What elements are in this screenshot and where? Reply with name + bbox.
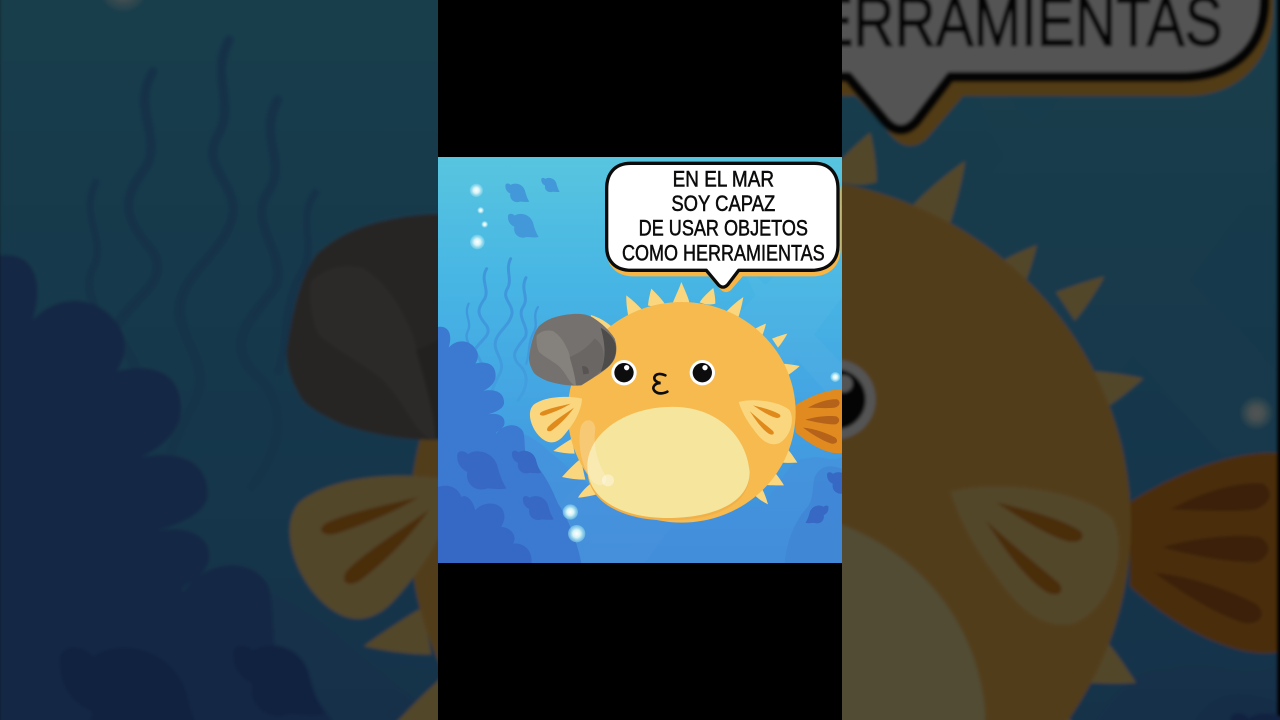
belly <box>580 407 750 520</box>
coral: right <box>800 466 842 518</box>
left fin <box>530 397 582 442</box>
bubbles <box>470 184 840 542</box>
speech bubble text <box>622 166 825 265</box>
fish 7 <box>805 506 829 523</box>
belly highlight <box>580 420 606 485</box>
fish 4 <box>457 451 506 490</box>
fish 3 <box>508 214 539 238</box>
speech bubble shape <box>606 163 841 292</box>
fish 1 <box>541 178 560 192</box>
right fin <box>739 400 792 444</box>
left eye <box>611 360 637 385</box>
highlight dot <box>602 474 614 486</box>
central black column <box>438 0 842 720</box>
panel: central illustration <box>438 157 855 563</box>
speech bubble text: COMO HERRAMIENTAS <box>622 240 825 265</box>
sea background <box>438 157 842 563</box>
speech bubble text: EN EL MAR <box>673 166 774 191</box>
spines <box>553 282 800 504</box>
fish 5 <box>512 451 541 473</box>
lower mid coral <box>524 434 553 455</box>
fish 8 <box>827 472 855 494</box>
light rays <box>505 204 842 563</box>
right eye <box>690 360 715 385</box>
seaweed <box>467 259 538 410</box>
fish 2 <box>505 184 529 202</box>
speech bubble text: DE USAR OBJETOS <box>639 216 808 241</box>
small fish, light <box>505 178 560 238</box>
fish 6 <box>523 496 554 520</box>
rock <box>529 314 616 386</box>
coral: bottom left foreground <box>438 486 532 563</box>
mouth <box>653 374 667 393</box>
tail fin <box>795 390 842 453</box>
small fish, dark <box>457 451 855 523</box>
coral: left <box>438 327 581 563</box>
body <box>568 302 796 523</box>
speech bubble text: SOY CAPAZ <box>671 191 775 216</box>
